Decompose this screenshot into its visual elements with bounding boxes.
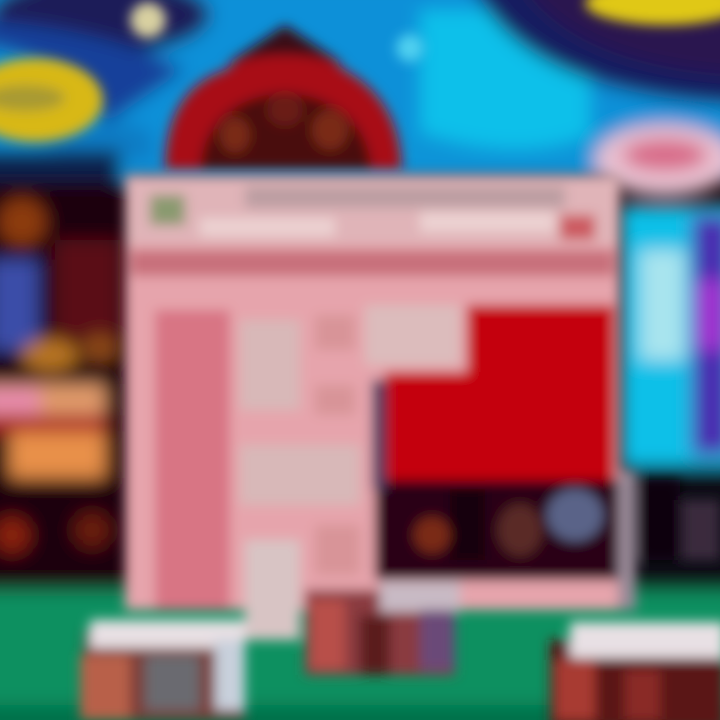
text blocks xyxy=(240,305,460,640)
pink panel xyxy=(125,175,620,640)
yellow sign top right xyxy=(585,0,720,25)
yellow sign top left xyxy=(0,58,103,142)
moon xyxy=(130,2,166,38)
dark image strip xyxy=(372,380,620,580)
right pole xyxy=(618,470,636,610)
bottom box right xyxy=(550,622,720,720)
left column xyxy=(155,310,230,610)
right panel xyxy=(595,124,720,595)
bottom box centre xyxy=(305,582,460,675)
header band xyxy=(130,250,615,276)
ground xyxy=(0,590,720,720)
red dome xyxy=(165,25,402,170)
star xyxy=(396,34,424,62)
panel header xyxy=(125,175,620,245)
dark left panel xyxy=(0,180,130,610)
red block xyxy=(385,305,615,480)
sky background xyxy=(0,0,720,190)
bottom box left xyxy=(80,620,245,720)
